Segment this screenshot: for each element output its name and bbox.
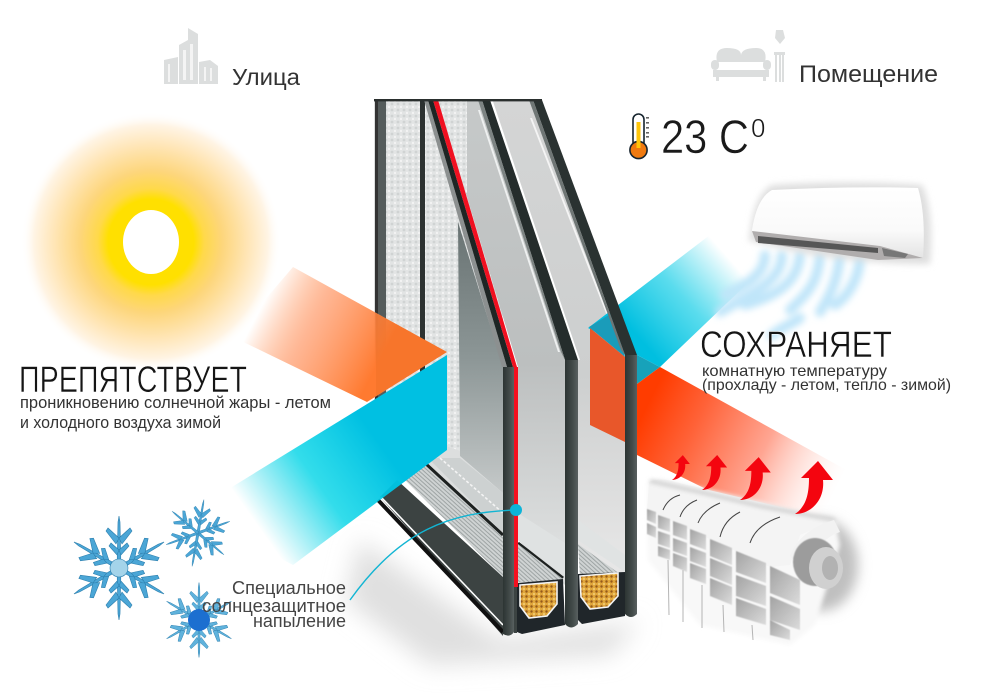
coating callout line xyxy=(350,504,522,600)
radiator xyxy=(647,478,858,645)
heat arrows xyxy=(672,455,833,514)
icon: thermometer xyxy=(630,114,649,159)
radiator end cap xyxy=(790,520,843,589)
red room band between panes xyxy=(590,328,625,442)
heading: retains: СОХРАНЯЕТ xyxy=(700,324,892,365)
temperature: 23 C xyxy=(661,110,749,163)
icon: sofa and lamp xyxy=(711,30,785,82)
white edge along pane 2 xyxy=(490,100,580,360)
orange sun band xyxy=(233,267,447,402)
temperature: 0 xyxy=(751,113,765,143)
red room band xyxy=(637,367,850,560)
blue room band xyxy=(588,225,770,384)
heading: prevents: ПРЕПЯТСТВУЕТ xyxy=(19,359,247,400)
gold desiccant spacers xyxy=(517,572,625,634)
text: prevents description xyxy=(20,393,331,432)
text: retains description xyxy=(702,363,951,394)
sill and frame profile xyxy=(378,458,503,636)
label: special coating: напыление xyxy=(253,611,346,631)
window back frame xyxy=(374,100,505,560)
front pane 3 xyxy=(529,100,637,617)
pane 3 glass xyxy=(491,100,625,590)
snowflake large xyxy=(67,516,171,620)
label: room: Помещение xyxy=(799,61,938,88)
radiator fin cells xyxy=(647,509,800,640)
icon: city buildings xyxy=(164,28,218,84)
label: special coating xyxy=(202,578,346,631)
label: special coating: солнцезащитное xyxy=(202,596,346,616)
window top edge xyxy=(374,99,542,101)
label: special coating: Специальное xyxy=(232,578,346,598)
front pane 2 xyxy=(478,100,578,628)
snowflake with blue crystal xyxy=(162,583,236,657)
label: street: Улица xyxy=(232,64,300,90)
blue cold band xyxy=(225,355,447,565)
white edge along pane 3 xyxy=(530,118,623,352)
light strip on pane 2 xyxy=(438,100,467,193)
pane 2 glass xyxy=(438,100,565,585)
air conditioner xyxy=(748,182,931,264)
sun xyxy=(21,112,281,372)
air conditioner cold air xyxy=(720,255,860,335)
window shadow xyxy=(345,540,640,665)
text: prevents description: и холодного воздуха зимой xyxy=(20,413,221,432)
snowflake small xyxy=(163,498,233,568)
front pane 1 with red coating xyxy=(424,100,518,636)
text: retains description: (прохладу - летом, тепло - зимой) xyxy=(702,377,951,394)
sill strips on inner panes xyxy=(518,513,625,582)
text: retains description: комнатную температуру xyxy=(702,363,887,380)
pale edge on pane 2 xyxy=(478,110,560,352)
text: prevents description: проникновению солнечной жары - летом xyxy=(20,393,331,412)
